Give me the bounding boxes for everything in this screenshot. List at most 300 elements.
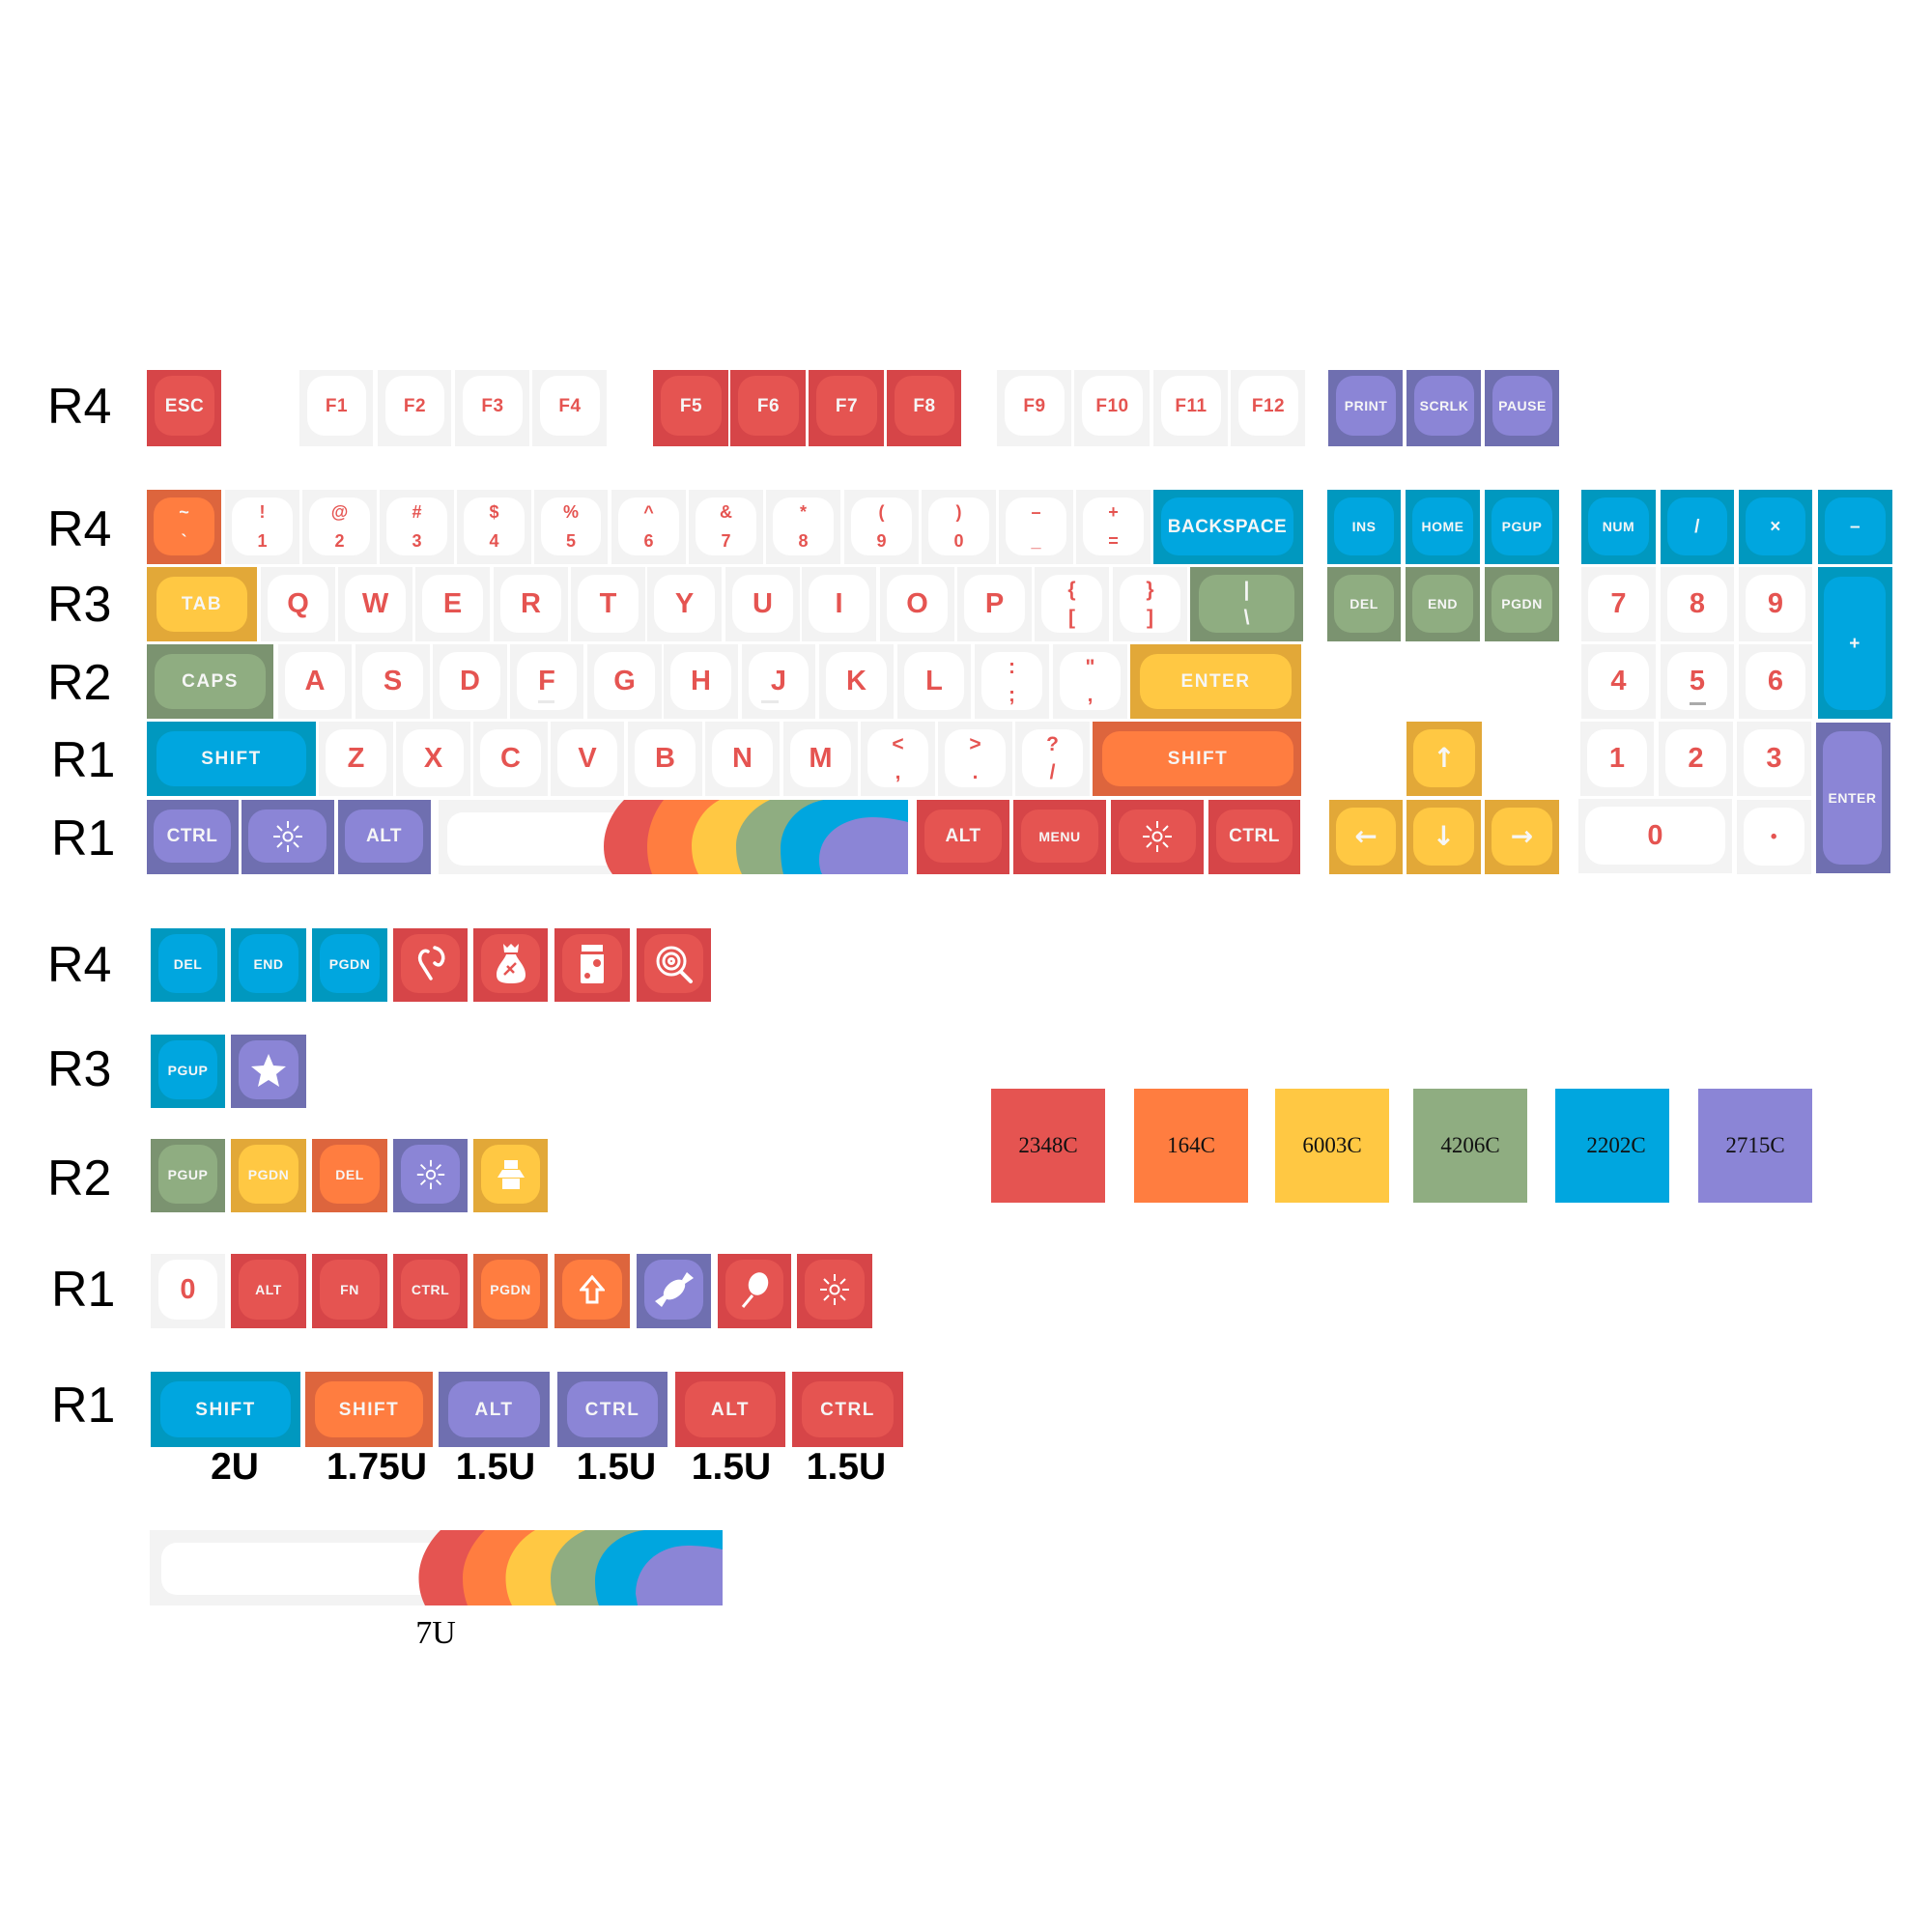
key: 3: # (412, 502, 421, 522)
key: CTRL 1.5U red (792, 1372, 903, 1447)
key: 2: @ (331, 502, 348, 522)
row label R1 bottom row: R1 (51, 810, 115, 867)
key: sun icon (797, 1254, 872, 1328)
key: F12 (1231, 370, 1305, 446)
key: PAUSE: PAUSE (1498, 398, 1547, 413)
size label 1.5U: 1.5U (807, 1446, 886, 1488)
key: 0 (922, 490, 996, 564)
key: O (880, 567, 954, 641)
key: right bracket: } (1146, 579, 1154, 601)
size label 1.5U: 1.5U (692, 1446, 771, 1488)
key: N (705, 722, 780, 796)
key: F1 (299, 370, 373, 446)
key: sun icon (393, 1139, 468, 1212)
key: 5: 5 (566, 531, 576, 551)
key: F6 (730, 370, 806, 446)
homing bar: J key (761, 700, 779, 703)
key: right ALT (917, 800, 1009, 874)
key: BACKSPACE: BACKSPACE (1168, 516, 1287, 537)
key: minus: _ (1031, 531, 1041, 551)
key: right SHIFT: SHIFT (1168, 749, 1228, 769)
key: shift arrow icon (554, 1254, 630, 1328)
key: numpad 1: 1 (1609, 742, 1625, 773)
key: down arrow (1406, 800, 1481, 874)
key: numpad ENTER (1816, 723, 1890, 873)
key: right arrow: → (1511, 820, 1533, 852)
key: U: U (753, 587, 773, 618)
key: slash: / (1050, 761, 1055, 783)
key: 3: 3 (412, 531, 421, 551)
key: 7 (689, 490, 763, 564)
panel: modifier keys with sizes (151, 1372, 903, 1447)
key: P: P (985, 587, 1004, 618)
key: ALT 1.5U red (675, 1372, 785, 1447)
key: divide (1661, 490, 1734, 564)
key: I (802, 567, 876, 641)
key: END: END (1428, 596, 1458, 611)
swatch: 6003C (1275, 1089, 1389, 1203)
key: M: M (809, 742, 833, 773)
panel: navigation cluster (1327, 490, 1559, 874)
key: SHIFT 1.75U (305, 1372, 433, 1447)
key: F4 (532, 370, 607, 446)
key: F5 (653, 370, 728, 446)
key: J: J (771, 665, 786, 696)
size label 1.5U: 1.5U (456, 1446, 535, 1488)
key: left ALT (338, 800, 431, 874)
key: PRINT (1328, 370, 1403, 446)
key: 2 (302, 490, 377, 564)
size label 1.5U: 1.5U (577, 1446, 656, 1488)
key: PGUP (151, 1035, 225, 1108)
key: MENU (1013, 800, 1106, 874)
key: numpad 8: 8 (1690, 587, 1705, 618)
key: 7: & (720, 502, 732, 522)
key: semicolon: : (1009, 656, 1015, 678)
key: left bracket: [ (1068, 607, 1075, 629)
key: ESC (147, 370, 221, 446)
key: candy cane icon (393, 928, 468, 1002)
homing bar: numpad 5 (1690, 702, 1706, 705)
key: ENTER (1130, 644, 1301, 719)
key: I: I (835, 587, 843, 618)
key: END (231, 928, 306, 1002)
key: rainbow spacebar (439, 800, 908, 874)
key: 5 (534, 490, 608, 564)
key: ALT 1.5U red: ALT (711, 1399, 750, 1420)
key: numpad 1 (1580, 722, 1654, 796)
key: 7: 7 (721, 531, 730, 551)
swatch: 2715C (1698, 1089, 1812, 1203)
key: slash (1015, 722, 1090, 796)
key: 6 (611, 490, 686, 564)
key: F2 (378, 370, 451, 446)
key: 2: 2 (334, 531, 344, 551)
key: F7: F7 (836, 396, 858, 415)
key: numpad 4 (1581, 644, 1656, 719)
key: equals: + (1108, 502, 1119, 522)
key: CTRL (393, 1254, 468, 1328)
key: CTRL 1.5U purple: CTRL (585, 1399, 639, 1420)
key: INS: INS (1352, 519, 1376, 534)
key: backslash (1190, 567, 1303, 641)
key: A (278, 644, 352, 719)
key: PGDN: PGDN (490, 1282, 531, 1297)
key: left ALT: ALT (366, 826, 402, 846)
key: CAPS: CAPS (182, 671, 239, 692)
key: ENTER: ENTER (1181, 671, 1250, 692)
key: numpad 9: 9 (1768, 587, 1783, 618)
key: H (664, 644, 738, 719)
key: F11: F11 (1175, 396, 1208, 415)
key: T: T (600, 587, 616, 618)
key: 1: ! (259, 502, 265, 522)
key: Q (261, 567, 335, 641)
row label R2: R2 (47, 655, 111, 711)
panel: extra keys R1 (151, 1254, 872, 1328)
key: SHIFT 1.75U: SHIFT (339, 1399, 399, 1420)
key: DEL (312, 1139, 387, 1212)
key: Z (319, 722, 393, 796)
key: quote (1053, 644, 1127, 719)
key: F10 (1074, 370, 1150, 446)
key: F5: F5 (680, 396, 702, 415)
key: SCRLK: SCRLK (1420, 398, 1468, 413)
key: G: G (613, 665, 636, 696)
key: numpad plus: + (1849, 634, 1861, 653)
key: DEL (1327, 567, 1401, 641)
key: W: W (362, 587, 388, 618)
key: Y: Y (675, 587, 694, 618)
key: PRINT: PRINT (1345, 398, 1387, 413)
key: numpad 0: 0 (1647, 819, 1663, 850)
key: 6: 6 (643, 531, 653, 551)
key: numpad 8 (1661, 567, 1734, 641)
key: numpad plus (1818, 567, 1892, 719)
key: comma (861, 722, 935, 796)
key: period: > (969, 733, 981, 755)
key: F10: F10 (1095, 396, 1129, 415)
key: H: H (691, 665, 711, 696)
key: SHIFT 2U (151, 1372, 300, 1447)
key: F4: F4 (558, 396, 582, 415)
key: 8: 8 (798, 531, 808, 551)
key: spiral lollipop icon (637, 928, 711, 1002)
size label 1.75U: 1.75U (327, 1446, 427, 1488)
key: tilde: ` (182, 531, 187, 551)
key: left bracket: { (1067, 579, 1076, 601)
key: DEL: DEL (174, 956, 202, 972)
key: K: K (846, 665, 867, 696)
key: F9: F9 (1023, 396, 1046, 415)
key: 0: 0 (180, 1273, 196, 1304)
key: backslash: | (1244, 579, 1249, 601)
key: F2: F2 (404, 396, 426, 415)
key: 4 (457, 490, 531, 564)
key: PGDN (312, 928, 387, 1002)
key: FN: FN (340, 1282, 359, 1297)
key: F7 (809, 370, 884, 446)
key: Y (647, 567, 722, 641)
key: PGDN (231, 1139, 306, 1212)
swatch: 2348C (991, 1089, 1105, 1203)
key: F1: F1 (326, 396, 348, 415)
panel: colour swatches (991, 1089, 1812, 1203)
key: ALT 1.5U purple (439, 1372, 550, 1447)
key: G (587, 644, 662, 719)
key: 9: 9 (876, 531, 887, 551)
row label R1 extras: R1 (51, 1262, 115, 1318)
key: minus: – (1031, 502, 1041, 522)
key: PGUP (1485, 490, 1559, 564)
key: right sun icon (1111, 800, 1204, 874)
key: MENU: MENU (1038, 829, 1081, 844)
key: INS (1327, 490, 1401, 564)
key: T (571, 567, 645, 641)
key: multiply: × (1770, 516, 1781, 537)
key: A: A (305, 665, 325, 696)
key: TAB (147, 567, 257, 641)
row label R3 extras: R3 (47, 1041, 111, 1097)
key: comma: < (892, 733, 904, 755)
key: TAB: TAB (182, 594, 222, 614)
key: N: N (732, 742, 753, 773)
key: HOME (1406, 490, 1480, 564)
key: HOME: HOME (1422, 519, 1464, 534)
key: 4: 4 (489, 531, 498, 551)
key: numpad ENTER: ENTER (1829, 790, 1876, 806)
row label R4 extras: R4 (47, 937, 111, 993)
key: candy jar icon (554, 928, 630, 1002)
key: numpad 9 (1739, 567, 1812, 641)
swatch: 4206C (1413, 1089, 1527, 1203)
key: F12: F12 (1252, 396, 1285, 415)
key: SHIFT 2U: SHIFT (195, 1399, 256, 1420)
key: X: X (424, 742, 442, 773)
key: numpad 7 (1581, 567, 1656, 641)
key: left arrow (1329, 800, 1403, 874)
panel: main alpha block (147, 490, 1303, 874)
key: NUM: NUM (1603, 519, 1634, 534)
key: E: E (443, 587, 462, 618)
key: lollipop icon (718, 1254, 791, 1328)
key: left SHIFT: SHIFT (201, 749, 262, 769)
key: equals (1076, 490, 1151, 564)
key: K (819, 644, 894, 719)
key: F11 (1153, 370, 1228, 446)
key: numpad 7: 7 (1610, 587, 1627, 618)
swatch: 6003C: 6003C (1302, 1133, 1362, 1157)
key: left bracket (1035, 567, 1109, 641)
panel: numeric keypad (1578, 490, 1892, 874)
key: PGDN: PGDN (329, 956, 370, 972)
key: B: B (655, 742, 675, 773)
key: R (494, 567, 568, 641)
key: semicolon (975, 644, 1049, 719)
key: period: . (973, 761, 978, 783)
row label R4 function row: R4 (47, 379, 111, 435)
key: semicolon: ; (1009, 684, 1015, 706)
key: left CTRL (147, 800, 239, 874)
key: F9 (997, 370, 1071, 446)
size label 7U: 7U (415, 1615, 456, 1651)
key: period (938, 722, 1012, 796)
key: CAPS (147, 644, 273, 719)
key: M (783, 722, 858, 796)
key: 1 (225, 490, 299, 564)
key: quote: " (1086, 656, 1094, 678)
key: F: F (538, 665, 555, 696)
key: up arrow: ↑ (1433, 742, 1456, 774)
key: C: C (500, 742, 521, 773)
key: END (1406, 567, 1480, 641)
key: numpad 2: 2 (1688, 742, 1704, 773)
key: 0 (151, 1254, 225, 1328)
key: numpad period: • (1771, 827, 1777, 846)
key: L: L (925, 665, 943, 696)
key: tilde: ~ (179, 502, 189, 522)
key: left sun icon (242, 800, 334, 874)
key: P (957, 567, 1032, 641)
key: BACKSPACE (1153, 490, 1303, 564)
row label R2 extras: R2 (47, 1151, 111, 1207)
key: right SHIFT (1093, 722, 1301, 796)
key: S (355, 644, 430, 719)
key: numpad period (1737, 800, 1811, 874)
key: C (473, 722, 548, 796)
key: right CTRL: CTRL (1229, 826, 1280, 846)
key: up arrow (1406, 722, 1482, 796)
key: F3: F3 (481, 396, 504, 415)
key: V: V (578, 742, 597, 773)
key: PGUP (151, 1139, 225, 1212)
swatch: 2715C: 2715C (1725, 1133, 1785, 1157)
key: R: R (521, 587, 541, 618)
key: ALT 1.5U purple: ALT (474, 1399, 514, 1420)
row label R1 modifiers: R1 (51, 1378, 115, 1434)
key: ALT (231, 1254, 306, 1328)
swatch: 4206C: 4206C (1440, 1133, 1500, 1157)
key: Z: Z (348, 742, 364, 773)
key: equals: = (1108, 531, 1119, 551)
panel: extra keys R3 (151, 1035, 306, 1108)
panel: extra keys R2 (151, 1139, 548, 1212)
key: 5: % (563, 502, 579, 522)
key: gift box icon (473, 1139, 548, 1212)
key: quote: , (1088, 684, 1093, 706)
key: numpad 6 (1739, 644, 1812, 719)
key: numpad 3 (1737, 722, 1811, 796)
key: tilde (147, 490, 221, 564)
key: 4: $ (489, 502, 498, 522)
panel: function row keys (147, 370, 1559, 446)
key: PGUP: PGUP (168, 1167, 208, 1182)
key: 6: ^ (643, 502, 654, 522)
key: S: S (384, 665, 402, 696)
key: PGDN (1485, 567, 1559, 641)
key: SCRLK (1406, 370, 1481, 446)
key: numpad 5 (1661, 644, 1734, 719)
key: multiply (1739, 490, 1812, 564)
key: D (433, 644, 507, 719)
key: right ALT: ALT (945, 826, 981, 846)
key: numpad 2 (1659, 722, 1733, 796)
key: 1: 1 (257, 531, 267, 551)
key: V (551, 722, 624, 796)
key: right bracket (1113, 567, 1187, 641)
key: divide: / (1694, 516, 1700, 537)
key: NUM (1581, 490, 1656, 564)
key: left SHIFT (147, 722, 316, 796)
key: 9: ( (879, 502, 885, 522)
key: CTRL 1.5U red: CTRL (820, 1399, 875, 1420)
key: 7U rainbow spacebar (150, 1530, 723, 1605)
key: star icon (231, 1035, 306, 1108)
key: J (742, 644, 815, 719)
key: 0: 0 (953, 531, 964, 551)
key: CTRL: CTRL (412, 1282, 449, 1297)
key: 3 (380, 490, 454, 564)
key: PGDN (473, 1254, 548, 1328)
key: minus (999, 490, 1073, 564)
key: PGDN: PGDN (248, 1167, 289, 1182)
key: right CTRL (1208, 800, 1300, 874)
key: numpad 3: 3 (1766, 742, 1782, 773)
key: END: END (253, 956, 284, 972)
key: comma: , (895, 761, 900, 783)
key: F (510, 644, 583, 719)
key: candy bag icon (473, 928, 548, 1002)
key: Q: Q (287, 587, 309, 618)
key: 0: ) (956, 502, 962, 522)
key: subtract: – (1850, 516, 1861, 537)
key: E (415, 567, 490, 641)
row label R3: R3 (47, 577, 111, 633)
key: FN (312, 1254, 387, 1328)
key: 8 (766, 490, 840, 564)
key: wrapped candy icon (637, 1254, 711, 1328)
key: down arrow: ↓ (1433, 820, 1455, 852)
key: numpad 6: 6 (1768, 665, 1783, 696)
key: F8 (887, 370, 961, 446)
homing bar: F key (538, 700, 554, 703)
key: B (628, 722, 702, 796)
key: DEL: DEL (335, 1167, 364, 1182)
key: U (725, 567, 800, 641)
key: PGUP: PGUP (1502, 519, 1542, 534)
key: PAUSE (1485, 370, 1559, 446)
key: PGDN: PGDN (1501, 596, 1543, 611)
key: D: D (460, 665, 480, 696)
key: left arrow: ← (1354, 820, 1378, 852)
key: right bracket: ] (1147, 607, 1153, 629)
swatch: 164C: 164C (1167, 1133, 1215, 1157)
key: W (338, 567, 412, 641)
key: right arrow (1485, 800, 1559, 874)
key: PGUP: PGUP (168, 1063, 208, 1078)
swatch: 2202C (1555, 1089, 1669, 1203)
key: numpad 5: 5 (1690, 665, 1705, 696)
key: numpad 0 (1578, 799, 1732, 873)
row label R1 shift row: R1 (51, 732, 115, 788)
swatch: 164C (1134, 1089, 1248, 1203)
key: L (897, 644, 971, 719)
key: F6: F6 (757, 396, 780, 415)
key: X (396, 722, 470, 796)
panel: extra keys R4 (151, 928, 711, 1002)
swatch: 2348C: 2348C (1018, 1133, 1078, 1157)
key: left CTRL: CTRL (167, 826, 217, 846)
